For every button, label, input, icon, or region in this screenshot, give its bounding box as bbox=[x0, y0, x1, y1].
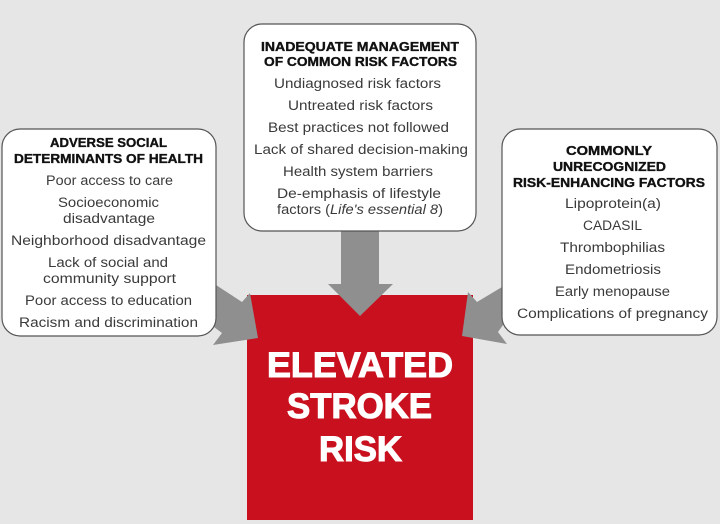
list: management factors: Health system barriers bbox=[283, 164, 433, 179]
list: risk-enhancing factors: Complications of pregnancy bbox=[517, 306, 708, 321]
heading: commonly unrecognized bbox=[513, 144, 705, 190]
panel: commonly unrecognized risk-enhancing factors bbox=[502, 129, 717, 335]
list: risk-enhancing factors: Lipoprotein(a) bbox=[565, 196, 661, 211]
list: social determinants: Poor access to care bbox=[46, 173, 173, 188]
list: management factors: Untreated risk factors bbox=[288, 98, 433, 113]
list: risk-enhancing factors: Early menopause bbox=[555, 284, 670, 299]
heading: inadequate management bbox=[261, 40, 459, 69]
panel: inadequate management of common risk factors bbox=[244, 24, 476, 231]
list: social determinants: Neighborhood disadvantage bbox=[11, 233, 206, 248]
heading: elevated stroke risk: STROKE bbox=[287, 387, 432, 426]
arrow: right bbox=[462, 287, 507, 344]
list: management factors bbox=[254, 76, 468, 217]
heading: adverse social determinants: DETERMINANTS OF HEALTH bbox=[14, 152, 203, 166]
arrow: center bbox=[328, 230, 393, 316]
heading: elevated stroke risk: ELEVATED bbox=[267, 346, 453, 385]
heading: inadequate management: INADEQUATE MANAGEMENT bbox=[261, 40, 459, 54]
list: risk-enhancing factors bbox=[517, 196, 708, 321]
list: management factors: De-emphasis of lifestyle bbox=[277, 186, 441, 201]
list: social determinants: Poor access to education bbox=[25, 293, 192, 308]
arrow: left bbox=[213, 285, 258, 345]
list: risk-enhancing factors: Thrombophilias bbox=[560, 240, 665, 255]
list: social determinants: Lack of social and bbox=[48, 255, 168, 270]
list: social determinants: Racism and discrimination bbox=[19, 315, 198, 330]
list: risk-enhancing factors: CADASIL bbox=[583, 218, 642, 233]
list: social determinants: disadvantage bbox=[63, 211, 155, 226]
heading: adverse social determinants bbox=[14, 136, 203, 166]
list: social determinants: Socioeconomic bbox=[58, 195, 159, 210]
heading: commonly unrecognized: UNRECOGNIZED bbox=[553, 160, 666, 174]
heading: commonly unrecognized: COMMONLY bbox=[566, 144, 653, 158]
list: management factors: Best practices not followed bbox=[268, 120, 449, 135]
heading: adverse social determinants: ADVERSE SOCIAL bbox=[50, 136, 167, 150]
heading: commonly unrecognized: RISK-ENHANCING FACTORS bbox=[513, 176, 705, 190]
heading: elevated stroke risk: RISK bbox=[319, 430, 402, 469]
list: management factors: factors ( Life's essential 8 ) bbox=[277, 202, 443, 217]
panel: adverse social determinants of health bbox=[2, 129, 216, 336]
panel: elevated stroke risk bbox=[247, 295, 473, 520]
list: management factors: Undiagnosed risk factors bbox=[274, 76, 441, 91]
list: risk-enhancing factors: Endometriosis bbox=[565, 262, 661, 277]
list: management factors: Lack of shared decision-making bbox=[254, 142, 468, 157]
heading: inadequate management: OF COMMON RISK FACTORS bbox=[264, 55, 457, 69]
list: social determinants: community support bbox=[43, 271, 176, 286]
list: social determinants bbox=[11, 173, 206, 330]
heading: elevated stroke risk bbox=[267, 346, 453, 469]
